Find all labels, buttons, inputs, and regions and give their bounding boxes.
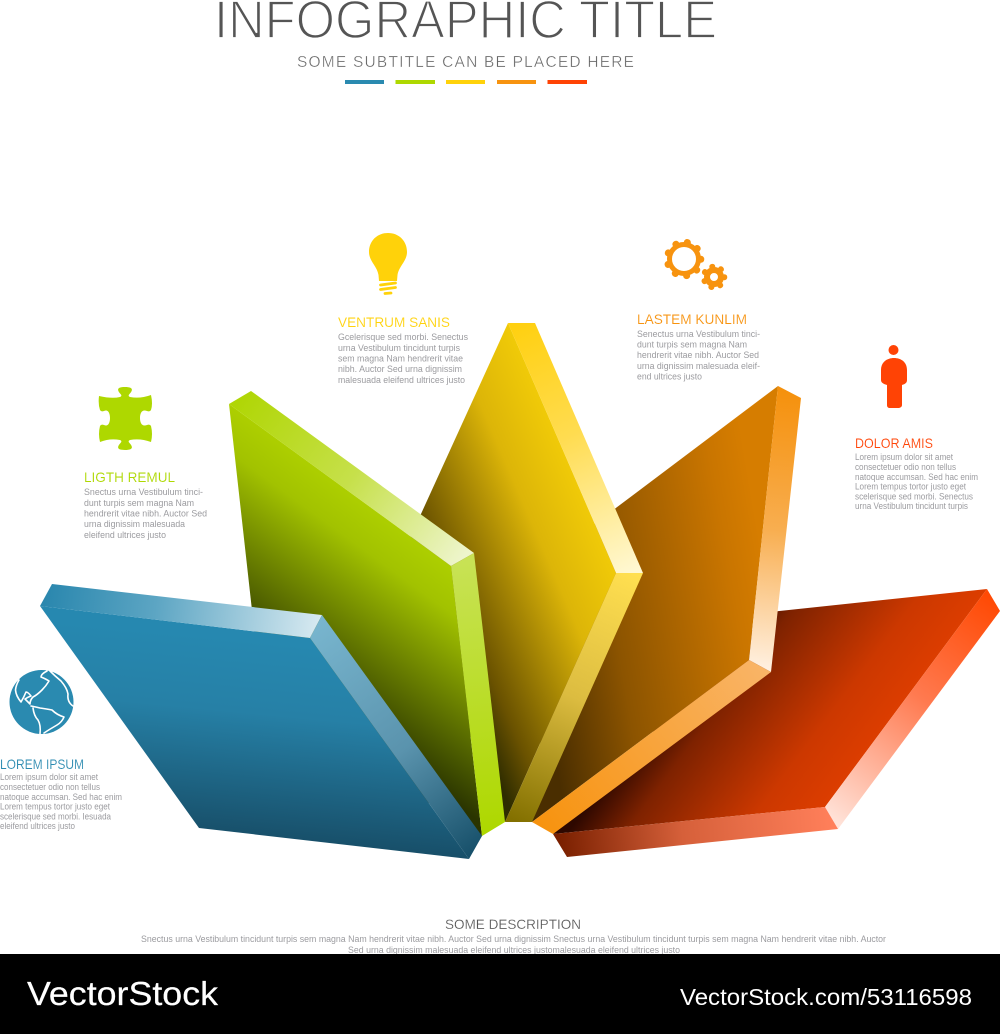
text block: ligth remul (84, 469, 207, 540)
text block: dolor amis: scelerisque sed morbi. Senectus (855, 492, 973, 502)
text block: ligth remul: eleifend ultrices justo (84, 530, 166, 540)
icon: person (881, 345, 907, 408)
text block: lorem ipsum: Lorem tempus tortor justo eget (0, 802, 110, 812)
text block: ventrum sanis: malesuada eleifend ultrices justo (338, 375, 465, 385)
text block: ventrum sanis: VENTRUM SANIS (338, 314, 450, 330)
text block: ventrum sanis: nibh. Auctor Sed urna dignissim (338, 364, 462, 374)
text block: lorem ipsum: scelerisque sed morbi. Iesuada (0, 812, 111, 822)
text block: lastem kunlim: hendrerit vitae nibh. Auctor Sed (637, 350, 759, 360)
text block: lorem ipsum: consectetuer odio non tellus (0, 782, 100, 792)
segment: yellow slab (400, 323, 643, 822)
text block: lastem kunlim: Senectus urna Vestibulum tinci- (637, 329, 760, 339)
icon: globe (10, 670, 74, 734)
text block: lorem ipsum (0, 756, 122, 831)
footer url: VectorStock.com/53116598 (680, 984, 972, 1010)
subtitle: SOME SUBTITLE CAN BE PLACED HERE (297, 54, 634, 71)
text block: ligth remul: dunt turpis sem magna Nam (84, 498, 194, 508)
text block: dolor amis: DOLOR AMIS (855, 435, 933, 451)
text block: dolor amis: Lorem tempus tortor justo eget (855, 482, 966, 492)
icon: gears (667, 242, 724, 288)
text block: lorem ipsum: LOREM IPSUM (0, 756, 84, 772)
text block: dolor amis: Lorem ipsum dolor sit amet (855, 452, 953, 462)
text block: ventrum sanis (338, 314, 468, 385)
text block: ventrum sanis: sem magna Nam hendrerit vitae (338, 354, 463, 364)
text block: lastem kunlim (637, 311, 760, 382)
segment: blue slab (40, 584, 482, 859)
text block: ventrum sanis: urna Vestibulum tincidunt turpis (338, 343, 460, 353)
text block: lorem ipsum: Lorem ipsum dolor sit amet (0, 772, 98, 782)
description text: Sed urna dignissim malesuada eleifend ultrices justomalesuada eleifend ultrices justo (348, 945, 680, 955)
text block: lorem ipsum: eleifend ultrices justo (0, 821, 75, 831)
description heading: SOME DESCRIPTION (445, 916, 581, 932)
footer logo: VectorStock (27, 975, 219, 1012)
text block: ventrum sanis: Gcelerisque sed morbi. Senectus (338, 332, 468, 342)
description text (141, 934, 886, 955)
segment: orange slab (532, 386, 801, 834)
segment: red slab (553, 589, 1000, 857)
description text: Snectus urna Vestibulum tincidunt turpis sem magna Nam hendrerit vitae nibh. Auctor Sed urna dignissim Snectus urna Vestibulum tincidunt turpis sem magna Nam hendrerit vitae nibh. Auctor (141, 934, 886, 944)
text block: lorem ipsum: natoque accumsan. Sed hac enim (0, 792, 122, 802)
segment: green slab (229, 391, 505, 836)
text block: dolor amis: natoque accumsan. Sed hac enim (855, 472, 978, 482)
text block: dolor amis: consectetuer odio non tellus (855, 462, 956, 472)
text block: ligth remul: Snectus urna Vestibulum tinci- (84, 487, 203, 497)
colour key bars (345, 80, 587, 84)
text block: ligth remul: urna dignissim malesuada (84, 519, 185, 529)
text block: lastem kunlim: dunt turpis sem magna Nam (637, 340, 747, 350)
icon: puzzle piece (99, 387, 152, 450)
text block: lastem kunlim: LASTEM KUNLIM (637, 311, 747, 327)
text block: dolor amis: urna Vestibulum tincidunt turpis (855, 501, 968, 511)
text block: ligth remul: LIGTH REMUL (84, 469, 175, 485)
text block: ligth remul: hendrerit vitae nibh. Auctor Sed (84, 508, 207, 518)
text block: lastem kunlim: end ultrices justo (637, 372, 702, 382)
text block: lastem kunlim: urna dignissim malesuada eleif- (637, 361, 760, 371)
text block: dolor amis (855, 435, 978, 511)
icon: light bulb (369, 233, 407, 294)
watermark footer bar (0, 954, 1000, 1034)
